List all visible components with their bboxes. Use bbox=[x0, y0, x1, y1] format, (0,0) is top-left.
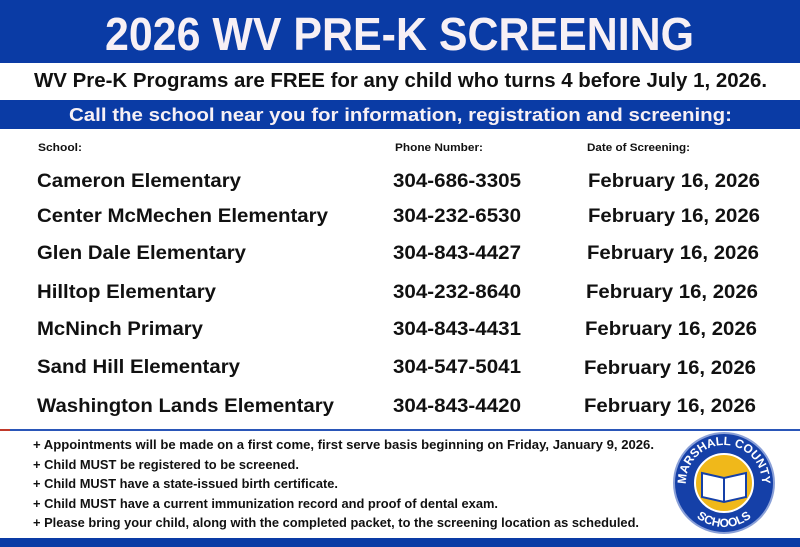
school table: McNinch Primary bbox=[37, 319, 203, 340]
subtitle: free programs: WV Pre-K Programs are FREE for any child who turns 4 before July 1, 2026. bbox=[34, 70, 767, 92]
school table: 304-547-5041 bbox=[393, 357, 521, 378]
school table: Hilltop Elementary bbox=[37, 282, 216, 303]
school table: Glen Dale Elementary bbox=[37, 243, 246, 264]
logo: Marshall County Schools bbox=[673, 432, 775, 534]
requirements list: + Child MUST have a current immunization record and proof of dental exam. bbox=[33, 497, 498, 511]
school table: Washington Lands Elementary bbox=[37, 396, 334, 417]
school table: February 16, 2026 bbox=[588, 171, 760, 192]
title banner bbox=[0, 0, 800, 63]
school table: Center McMechen Elementary bbox=[37, 206, 328, 227]
school table: February 16, 2026 bbox=[584, 358, 756, 379]
title banner: 2026 WV PRE-K SCREENING bbox=[105, 8, 694, 60]
column headers: Date of Screening: bbox=[587, 142, 690, 154]
school table: February 16, 2026 bbox=[585, 319, 757, 340]
requirements list bbox=[33, 438, 654, 530]
school table: 304-232-8640 bbox=[393, 282, 521, 303]
column headers bbox=[38, 142, 690, 154]
footer bar bbox=[0, 538, 800, 547]
school table: 304-843-4427 bbox=[393, 243, 521, 264]
school table: February 16, 2026 bbox=[588, 206, 760, 227]
school table: Cameron Elementary bbox=[37, 171, 241, 192]
logo: Marshall County Schools: SCHOOLS bbox=[698, 512, 750, 528]
column headers: School: bbox=[38, 142, 82, 154]
requirements list: + Appointments will be made on a first come, first serve basis beginning on Friday, January 9, 2026. bbox=[33, 438, 654, 452]
school table: 304-686-3305 bbox=[393, 171, 521, 192]
requirements list: + Child MUST have a state-issued birth certificate. bbox=[33, 477, 338, 491]
requirements list: + Child MUST be registered to be screened. bbox=[33, 458, 299, 472]
school table: 304-232-6530 bbox=[393, 206, 521, 227]
school table: February 16, 2026 bbox=[584, 396, 756, 417]
school table: 304-843-4431 bbox=[393, 319, 521, 340]
school table: Sand Hill Elementary bbox=[37, 357, 240, 378]
call banner: Call the school near you for information, registration and screening: bbox=[69, 105, 732, 125]
requirements list: + Please bring your child, along with the completed packet, to the screening location as scheduled. bbox=[33, 516, 639, 530]
school table: February 16, 2026 bbox=[586, 282, 758, 303]
school table: 304-843-4420 bbox=[393, 396, 521, 417]
column headers: Phone Number: bbox=[395, 142, 483, 154]
logo: Marshall County Schools: MARSHALL COUNTY bbox=[678, 436, 770, 484]
school table bbox=[37, 171, 760, 417]
school table: February 16, 2026 bbox=[587, 243, 759, 264]
call banner bbox=[0, 100, 800, 129]
